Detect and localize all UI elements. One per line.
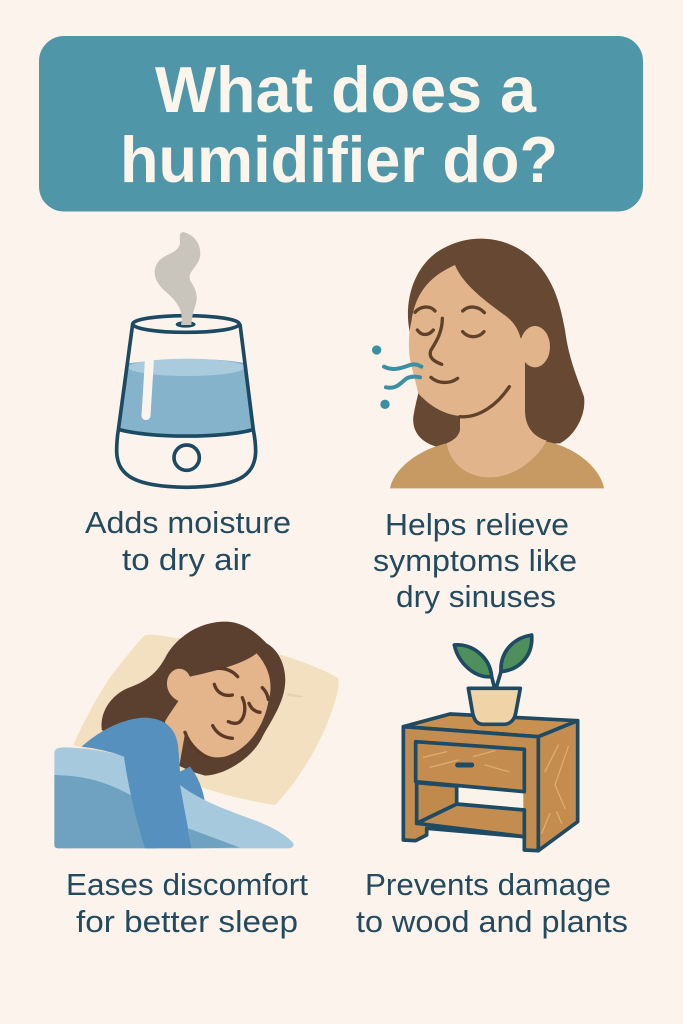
- caption: eases discomfort: [66, 867, 308, 939]
- icon: woman breathing: [372, 239, 604, 488]
- caption: relieves symptoms: [373, 507, 577, 614]
- caption: adds moisture: to dry air: [122, 542, 251, 577]
- title: What does a: [155, 53, 537, 126]
- caption: relieves symptoms: dry sinuses: [396, 579, 556, 614]
- caption: prevents damage: Prevents damage: [365, 867, 611, 902]
- title: humidifier do?: [120, 123, 558, 196]
- title banner: [39, 36, 643, 212]
- caption: prevents damage: [356, 867, 628, 939]
- caption: relieves symptoms: symptoms like: [373, 543, 577, 578]
- icon: nightstand with plant: [403, 635, 578, 851]
- caption: adds moisture: [85, 505, 291, 577]
- title: [120, 53, 558, 196]
- caption: adds moisture: Adds moisture: [85, 505, 291, 540]
- caption: prevents damage: to wood and plants: [356, 904, 628, 939]
- caption: eases discomfort: for better sleep: [76, 904, 298, 939]
- icon: humidifier: [117, 232, 256, 487]
- icon: sleeping woman: [54, 622, 339, 848]
- caption: relieves symptoms: Helps relieve: [385, 507, 569, 542]
- caption: eases discomfort: Eases discomfort: [66, 867, 308, 902]
